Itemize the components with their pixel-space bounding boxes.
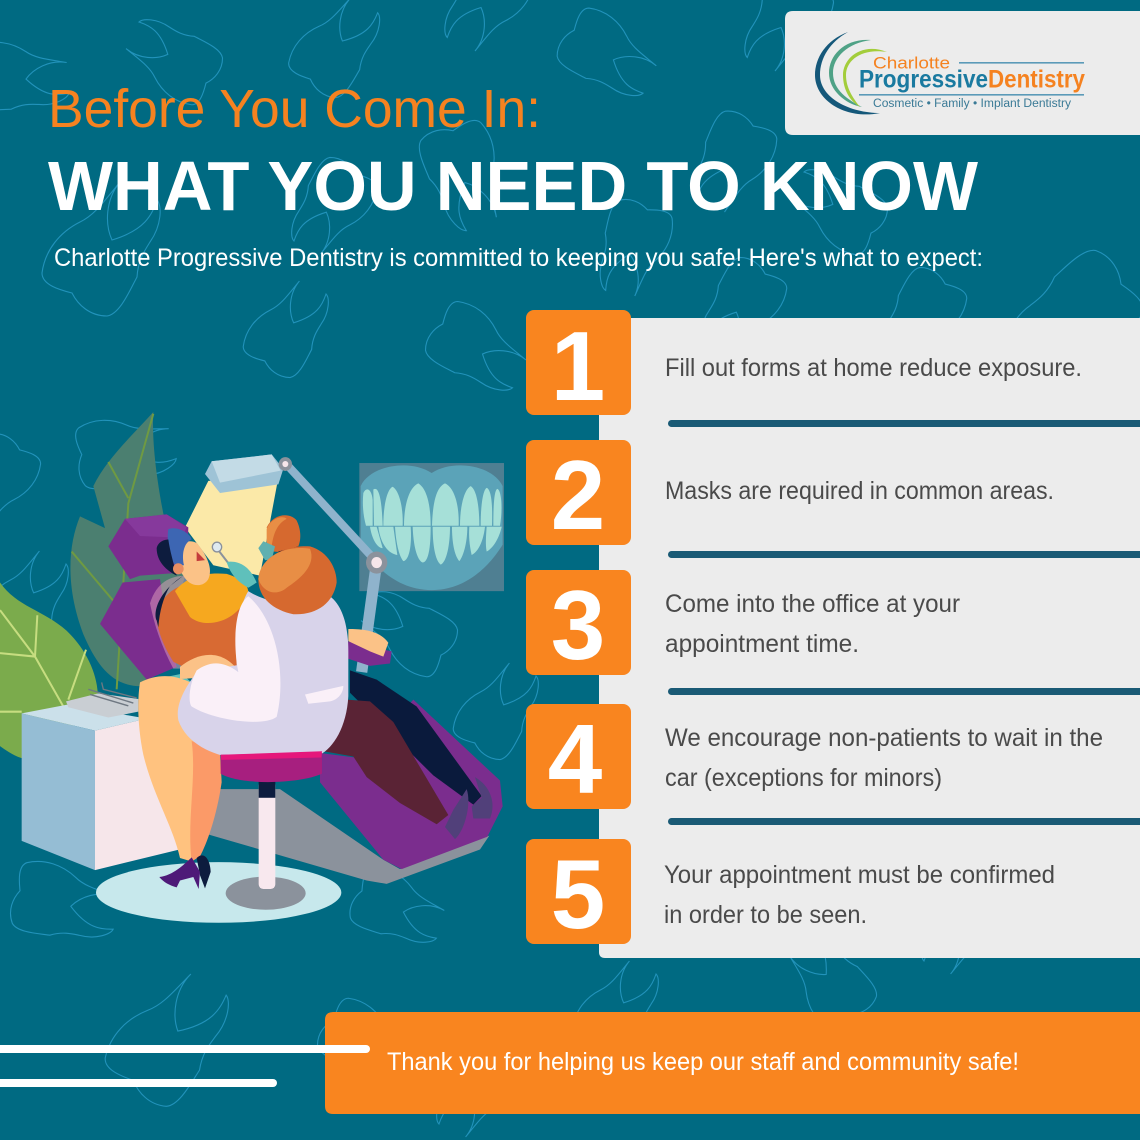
illustration: dentist treating patient	[0, 412, 504, 923]
step 5	[526, 839, 1055, 949]
step 2	[526, 440, 1054, 550]
logo wordmark: Cosmetic • Family • Implant Dentistry	[873, 98, 1071, 110]
step 1: Fill out forms at home reduce exposure.	[665, 354, 1082, 382]
patient	[150, 528, 493, 839]
step 3	[526, 570, 960, 680]
step 4: car (exceptions for minors)	[665, 764, 942, 792]
step 1	[526, 310, 1082, 421]
step 3: appointment time.	[665, 630, 859, 658]
back leaf	[70, 412, 187, 689]
dentist stool	[221, 751, 322, 910]
logo wordmark	[859, 54, 1085, 110]
logo wordmark: Charlotte	[873, 54, 950, 72]
floor ellipse	[96, 862, 341, 923]
title: before you come in: Before You Come In:	[48, 79, 541, 139]
dental chair	[100, 514, 503, 884]
logo panel	[785, 11, 1140, 135]
step 2: Masks are required in common areas.	[665, 477, 1054, 505]
step 4: 4	[548, 704, 602, 814]
logo wordmark: Progressive	[859, 66, 988, 94]
step 5: Your appointment must be confirmed	[664, 861, 1055, 889]
step 5: 5	[551, 839, 605, 949]
step 5: in order to be seen.	[664, 901, 867, 929]
footer banner: Thank you for helping us keep our staff and community safe!	[387, 1048, 1019, 1076]
panel: steps list	[526, 310, 1140, 958]
step 2: 2	[551, 440, 605, 550]
side table	[22, 705, 187, 870]
footer lines	[0, 1045, 370, 1087]
x-ray of teeth	[359, 463, 504, 591]
instrument tray	[66, 682, 138, 718]
step 1: 1	[551, 311, 605, 421]
logo wordmark: Dentistry	[988, 66, 1085, 94]
step 3: 3	[551, 570, 605, 680]
front leaf	[0, 583, 98, 758]
dental mirror tool and gloved hand	[165, 542, 257, 693]
dental lamp	[185, 454, 387, 672]
title: what you need to know: WHAT YOU NEED TO KNOW	[48, 147, 978, 225]
step 4	[526, 704, 1103, 814]
step 4: We encourage non-patients to wait in the	[665, 724, 1103, 752]
footer banner	[325, 1012, 1140, 1114]
logo arcs	[815, 32, 887, 114]
subtitle: Charlotte Progressive Dentistry is committed to keeping you safe! Here's what to expect:	[54, 244, 983, 272]
dentist	[138, 515, 388, 861]
dentist shoes	[159, 855, 211, 889]
step 3: Come into the office at your	[665, 590, 960, 618]
